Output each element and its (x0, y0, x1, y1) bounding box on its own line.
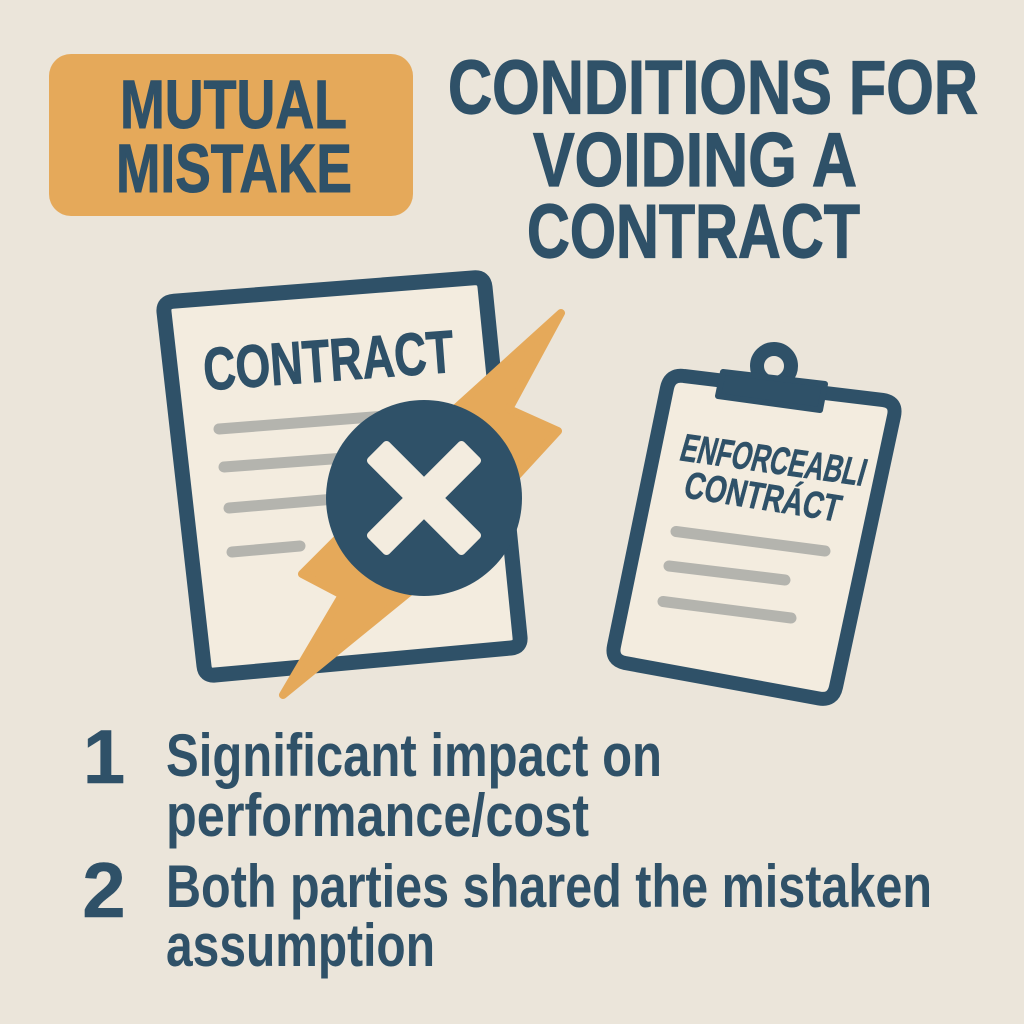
list item 2: 2 (82, 846, 126, 934)
list item 1: 1 (83, 715, 125, 800)
list item 2 (82, 846, 932, 979)
badge: mutual mistake: MUTUAL (120, 66, 347, 143)
badge: mutual mistake (49, 54, 413, 216)
list item 1 (83, 715, 662, 849)
icon: clipboard enforceable contract (613, 349, 895, 699)
list item 1: performance/cost (166, 782, 589, 849)
title (448, 46, 978, 274)
title: CONTRACT (527, 190, 860, 274)
title: VOIDING A (533, 118, 857, 203)
badge: mutual mistake: MISTAKE (116, 130, 352, 207)
document heading: CONTRACT (201, 318, 456, 403)
clipboard text lines (663, 532, 825, 618)
document text lines (219, 416, 385, 552)
clipboard clip (718, 349, 825, 410)
icon: lightning bolt (283, 313, 561, 695)
clipboard heading: CONTRÁCT (680, 463, 846, 530)
icon: voided contract document (164, 278, 520, 675)
list item 2: assumption (166, 912, 435, 979)
icon: x mark circle (326, 400, 522, 596)
clipboard heading (676, 427, 872, 530)
clipboard heading: ENFORCEABLI (676, 427, 872, 495)
list item 1: Significant impact on (166, 722, 662, 789)
